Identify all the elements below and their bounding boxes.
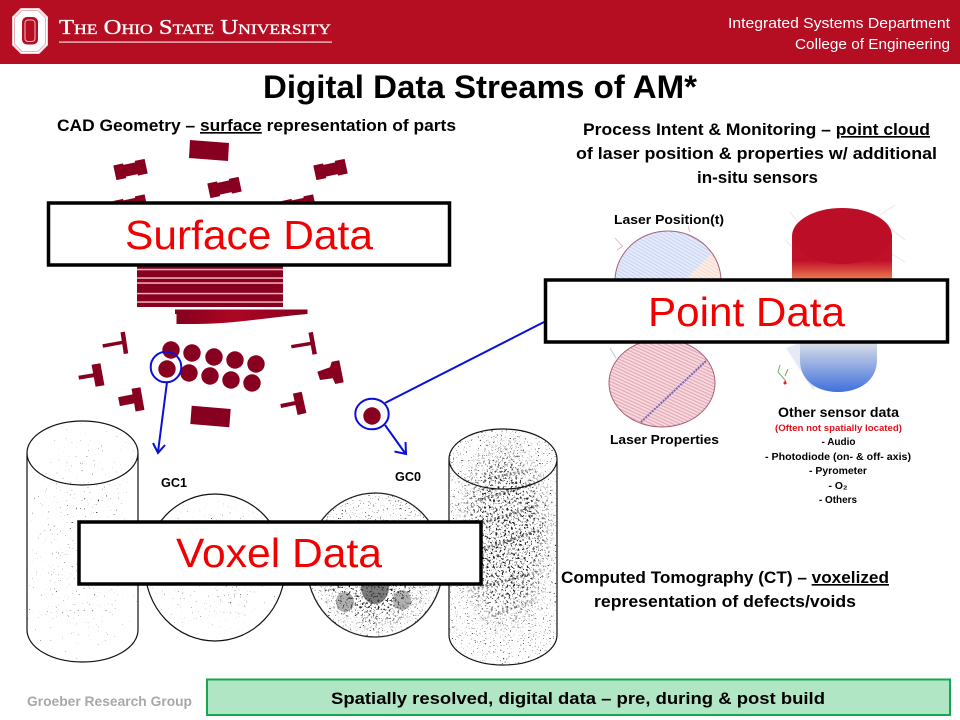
CT scan: GC0 cross-section <box>307 493 443 637</box>
CT scan: GC1 cylinder <box>27 420 138 665</box>
heading: CAD geometry: CAD Geometry – surface representation of parts <box>57 117 456 135</box>
label GC0: GC0 <box>395 470 421 484</box>
part: T-shaped specimens left <box>79 332 140 411</box>
heading: computed tomography: representation of defects/voids <box>594 593 856 611</box>
overlay box: surface data: Surface Data <box>125 212 373 258</box>
department text <box>728 15 951 53</box>
CAD parts layout <box>79 140 381 427</box>
heading: process intent and monitoring: of laser position & properties w/ additional <box>576 145 937 163</box>
other sensor data list: (Often not spatially located) <box>775 423 902 434</box>
heading: computed tomography: Computed Tomography (CT) – voxelized <box>561 569 889 587</box>
part: stacked layers <box>137 264 283 307</box>
part: top plate <box>189 140 229 161</box>
icon: axis triad <box>778 365 788 384</box>
chart: laser position point cloud <box>615 226 721 331</box>
blue selection circles and arrows <box>151 322 544 454</box>
icon: block O logo <box>12 8 48 54</box>
part: dogbone tensile bars <box>113 159 348 216</box>
part: curved wedge <box>175 310 308 324</box>
overlay box: point data <box>546 280 948 342</box>
part: cylinders array <box>158 341 265 392</box>
callout: GC1 selection <box>151 352 181 453</box>
footer: research group: Groeber Research Group <box>27 693 192 709</box>
chart: red point cloud cylinder <box>785 205 905 285</box>
label GC1: GC1 <box>161 476 187 490</box>
other sensor data list: - Pyrometer <box>809 465 867 477</box>
label: laser properties: Laser Properties <box>610 433 719 447</box>
callout: GC0 selection <box>355 322 544 454</box>
department text: College of Engineering <box>795 36 950 53</box>
other sensor data list: Other sensor data <box>778 405 900 420</box>
part: highlighted cylinder GC0 <box>363 407 381 425</box>
other sensor data list: - Others <box>819 494 857 506</box>
other sensor data list: - Photodiode (on- & off- axis) <box>765 451 911 463</box>
overlay box: voxel data <box>79 522 481 584</box>
university wordmark: The Ohio State University <box>59 15 331 39</box>
chart: laser properties point cloud <box>609 339 715 427</box>
other sensor data list: - O₂ <box>828 480 848 492</box>
heading: process intent and monitoring <box>576 121 937 187</box>
heading: process intent and monitoring: Process Intent & Monitoring – point cloud <box>583 121 930 139</box>
part: T-shaped specimens right <box>281 332 344 414</box>
department text: Integrated Systems Department <box>728 15 951 32</box>
other sensor data list <box>765 405 911 506</box>
overlay box: voxel data: Voxel Data <box>176 530 382 576</box>
CT scan: GC1 cross-section <box>145 494 285 641</box>
heading: process intent and monitoring: in-situ sensors <box>697 169 818 187</box>
chart: blue point cloud cylinder <box>786 340 877 392</box>
part: bottom plate <box>190 406 231 427</box>
footer: summary banner: Spatially resolved, digital data – pre, during & post build <box>331 690 825 708</box>
header band <box>0 0 960 64</box>
footer: summary banner <box>207 680 950 715</box>
other sensor data list: - Audio <box>822 436 856 448</box>
overlay box: surface data <box>48 203 450 265</box>
title: Digital Data Streams of AM* <box>263 69 698 105</box>
heading: computed tomography <box>561 569 889 611</box>
CT scan: GC0 cylinder <box>449 429 557 665</box>
label: laser position: Laser Position(t) <box>614 213 724 227</box>
overlay box: point data: Point Data <box>648 289 845 335</box>
